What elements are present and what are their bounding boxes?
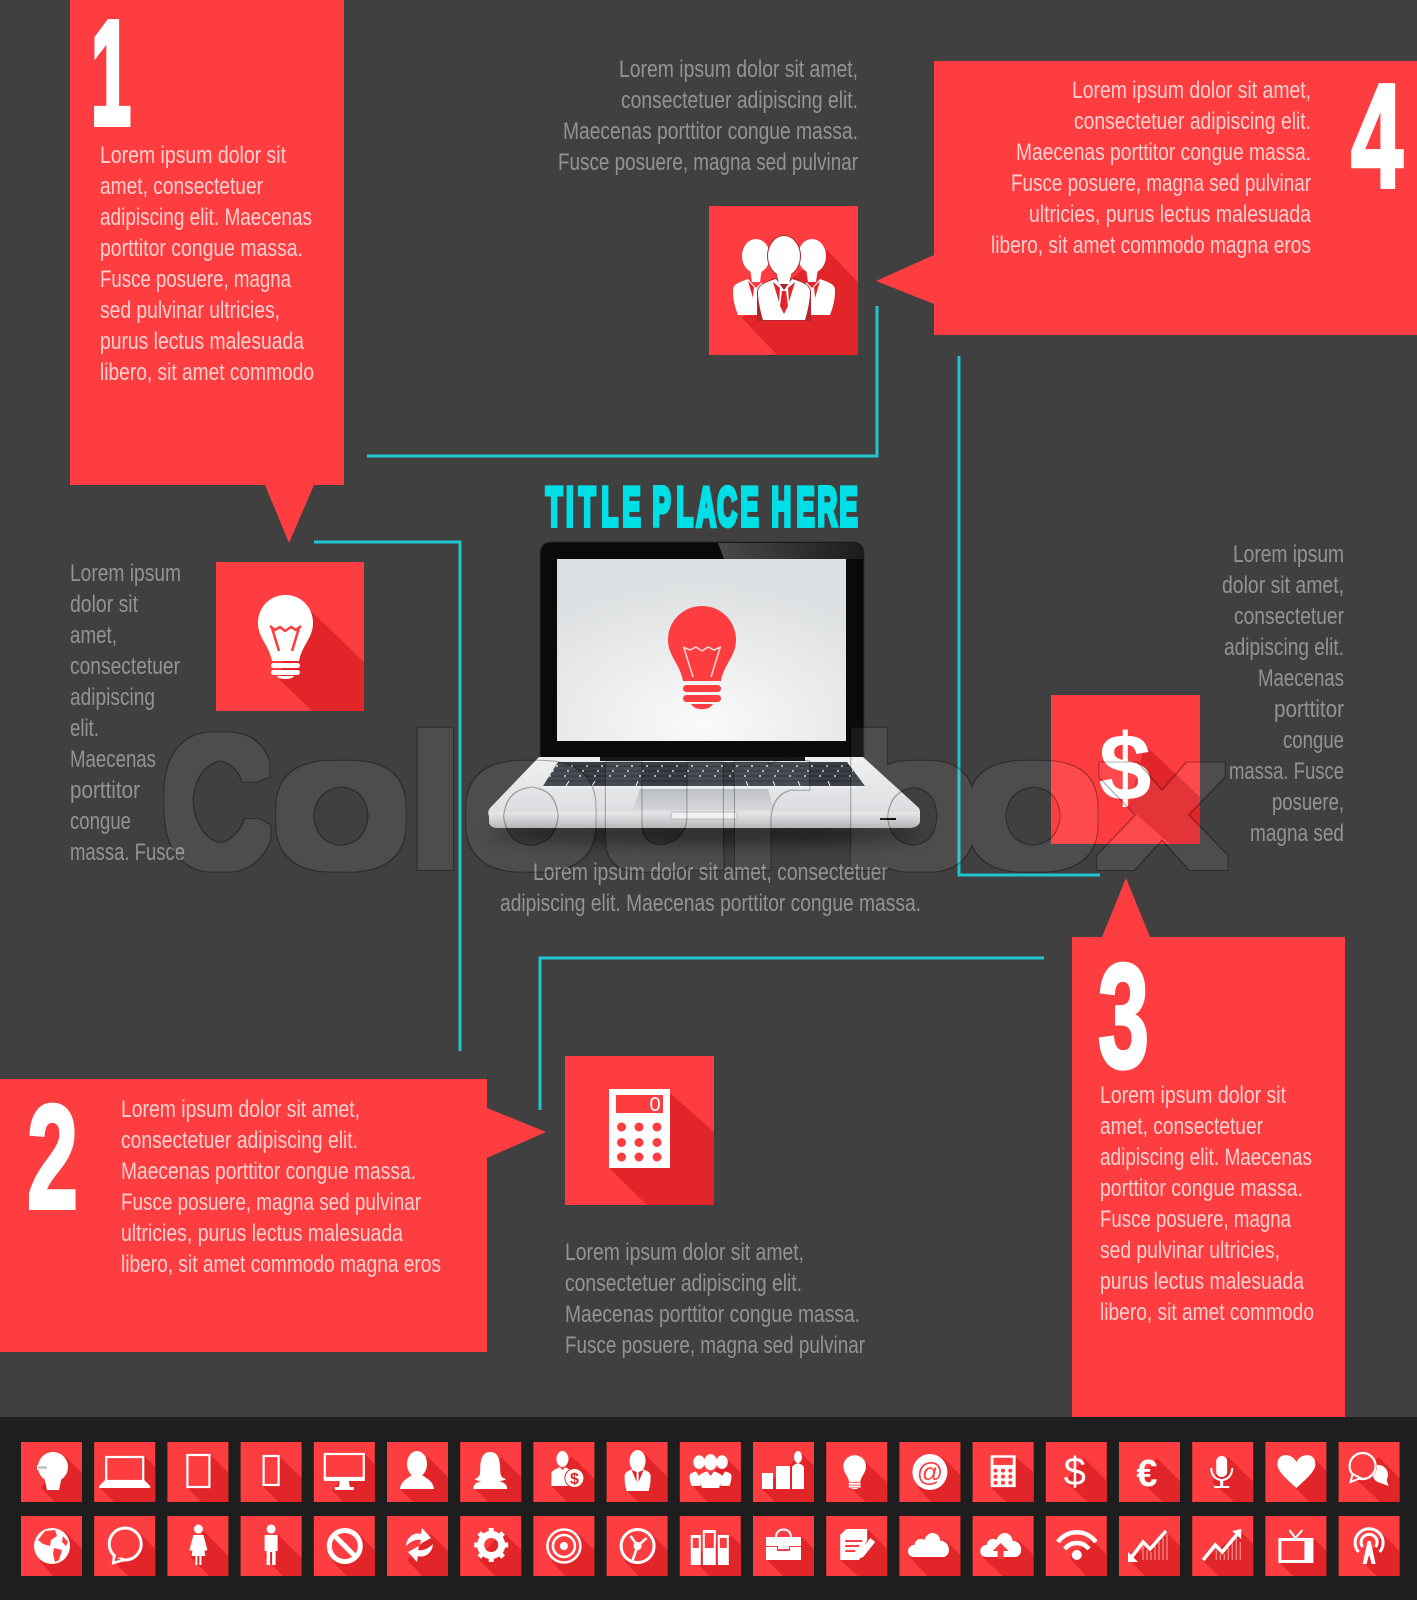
text block: top centre: Fusce posuere, magna sed pulvinar [558, 149, 858, 176]
icon: at sign [899, 1442, 960, 1502]
icon: speech bubbles [1339, 1442, 1400, 1502]
panel 2 text: Fusce posuere, magna sed pulvinar [121, 1189, 421, 1216]
laptop keyboard [543, 762, 865, 787]
text block: right of dollar icon: porttitor [1274, 696, 1344, 723]
panel 3 text: amet, consectetuer [1100, 1113, 1263, 1140]
icon: man in suit [607, 1442, 668, 1502]
text block: right of dollar icon: magna sed [1250, 820, 1344, 847]
laptop screen [557, 559, 846, 741]
icon: globe [21, 1516, 82, 1576]
icon: calculator: 0 [649, 1094, 661, 1116]
panel 1 text: sed pulvinar ultricies, [100, 297, 280, 324]
text block: left of bulb icon: dolor sit [70, 591, 138, 618]
icon: prohibited sign [314, 1516, 375, 1576]
icon: dollar sign: $ [1099, 715, 1151, 821]
panel 3 number: 3 [1098, 934, 1149, 1099]
connector line: bulb icon to panel 2 [314, 542, 460, 1051]
panel 1 text: purus lectus malesuada [100, 328, 305, 355]
panel 2 text: ultricies, purus lectus malesuada [121, 1220, 404, 1247]
text block: left of bulb icon: amet, [70, 622, 117, 649]
text block: top centre: consectetuer adipiscing elit. [621, 87, 858, 114]
panel 3 text: porttitor congue massa. [1100, 1175, 1303, 1202]
icon strip [0, 1417, 1417, 1600]
panel 2 text: Lorem ipsum dolor sit amet, [121, 1096, 360, 1123]
icon: cloud upload [973, 1516, 1034, 1576]
panel 2 text: consectetuer adipiscing elit. [121, 1127, 358, 1154]
connector line: panel 3 to calculator icon [540, 958, 1044, 1110]
text block: laptop caption [500, 859, 921, 917]
icon: euro: € [1136, 1453, 1158, 1495]
panel 3 text: adipiscing elit. Maecenas [1100, 1144, 1312, 1171]
text block: right of dollar icon: congue [1283, 727, 1344, 754]
laptop notch [671, 812, 737, 819]
icon: monitor [314, 1442, 375, 1502]
icon: microphone [1192, 1442, 1253, 1502]
icon: calculator [973, 1442, 1034, 1502]
panel 2 text: Maecenas porttitor congue massa. [121, 1158, 416, 1185]
panel 4 text: Fusce posuere, magna sed pulvinar [1011, 170, 1311, 197]
panel 3 text: Lorem ipsum dolor sit [1100, 1082, 1286, 1109]
watermark: C [164, 703, 269, 901]
panel 4 text: libero, sit amet commodo magna eros [991, 232, 1311, 259]
icon: man figure [241, 1516, 302, 1576]
panel 2 number: 2 [27, 1075, 78, 1240]
text block: left of bulb icon: adipiscing [70, 684, 155, 711]
icon: laptop [94, 1442, 155, 1502]
panel 1 text: adipiscing elit. Maecenas [100, 204, 312, 231]
text block: calculator caption: Lorem ipsum dolor sit amet, [565, 1239, 804, 1266]
icon: dollar sign [1051, 695, 1200, 844]
icon: gear [460, 1516, 521, 1576]
icon: speech bubble [94, 1516, 155, 1576]
icon: television [1265, 1516, 1326, 1576]
text block: right of dollar icon: consectetuer [1234, 603, 1344, 630]
icon: businessman with coin: $ [570, 1471, 579, 1488]
icon: dollar: $ [1064, 1450, 1086, 1494]
laptop base [488, 757, 920, 828]
icon: light bulb [826, 1442, 887, 1502]
panel 3 text: libero, sit amet commodo [1100, 1299, 1314, 1326]
text block: left of bulb icon: porttitor [70, 777, 140, 804]
panel 1 text [100, 142, 314, 386]
panel 3 text: Fusce posuere, magna [1100, 1206, 1291, 1233]
icon: light bulb [216, 562, 364, 711]
laptop lid and bezel [540, 542, 864, 758]
icon: target [533, 1516, 594, 1576]
panel 4 [876, 54, 1417, 335]
icon: falling chart [1119, 1516, 1180, 1576]
title: TITLE PLACE HERE [546, 477, 858, 538]
watermark: olourbox [273, 704, 1223, 901]
panel 3 text: sed pulvinar ultricies, [1100, 1237, 1280, 1264]
icon: document with pen [826, 1516, 887, 1576]
panel 4 text: Lorem ipsum dolor sit amet, [1072, 77, 1311, 104]
text block: left of bulb icon: Maecenas [70, 746, 156, 773]
icon: wifi [1046, 1516, 1107, 1576]
icon: cloud [899, 1516, 960, 1576]
icon: heart [1265, 1442, 1326, 1502]
panel 3 text: purus lectus malesuada [1100, 1268, 1305, 1295]
panel 4 text: Maecenas porttitor congue massa. [1016, 139, 1311, 166]
text block: laptop caption: Lorem ipsum dolor sit amet, consectetuer [533, 859, 888, 886]
panel 2 [0, 1075, 546, 1352]
panel 4 text [991, 77, 1312, 259]
text block: right of dollar icon [1222, 541, 1344, 847]
text block: top centre [558, 56, 858, 176]
icon: refresh arrows [387, 1516, 448, 1576]
panel 2 text [121, 1096, 441, 1278]
text block: left of bulb icon: consectetuer [70, 653, 180, 680]
panel 1 text: Lorem ipsum dolor sit [100, 142, 286, 169]
text block: right of dollar icon: adipiscing elit. [1224, 634, 1344, 661]
text block: left of bulb icon: congue [70, 808, 131, 835]
icon: woman figure [167, 1516, 228, 1576]
panel 4 text: consectetuer adipiscing elit. [1074, 108, 1311, 135]
text block: left of bulb icon: elit. [70, 715, 99, 742]
icon: man bust [387, 1442, 448, 1502]
icon: team of three people [709, 206, 858, 355]
panel 1 text: libero, sit amet commodo [100, 359, 314, 386]
laptop trackpad [633, 789, 774, 810]
icon: euro [1119, 1442, 1180, 1502]
text block: calculator caption: Fusce posuere, magna sed pulvinar [565, 1332, 865, 1359]
icon: woman bust [460, 1442, 521, 1502]
panel 2 text: libero, sit amet commodo magna eros [121, 1251, 441, 1278]
text block: right of dollar icon: Maecenas [1258, 665, 1344, 692]
icon: head with smart glasses [21, 1442, 82, 1502]
panel 1 text: amet, consectetuer [100, 173, 263, 200]
icon: team [680, 1442, 741, 1502]
icon: binders [680, 1516, 741, 1576]
text block: right of dollar icon: Lorem ipsum [1233, 541, 1344, 568]
icon: dollar [1046, 1442, 1107, 1502]
text block: right of dollar icon: posuere, [1272, 789, 1344, 816]
text block: right of dollar icon: dolor sit amet, [1222, 572, 1344, 599]
icon: businessman with coin [533, 1442, 594, 1502]
icon: at sign: @ [917, 1457, 943, 1487]
text block: left of bulb icon: Lorem ipsum [70, 560, 181, 587]
text block: calculator caption: consectetuer adipiscing elit. [565, 1270, 802, 1297]
laptop illustration [488, 542, 920, 844]
panel 1 text: porttitor congue massa. [100, 235, 303, 262]
text block: calculator caption: Maecenas porttitor congue massa. [565, 1301, 860, 1328]
panel 1 [70, 0, 344, 543]
screen bulb icon [668, 606, 736, 709]
panel 3 text [1100, 1082, 1314, 1326]
icon: bar chart and man [753, 1442, 814, 1502]
panel 4 text: ultricies, purus lectus malesuada [1029, 201, 1312, 228]
text block: left of bulb icon [70, 560, 185, 866]
text block: laptop caption: adipiscing elit. Maecenas porttitor congue massa. [500, 890, 921, 917]
text block: calculator caption [565, 1239, 865, 1359]
icon: phone [241, 1442, 302, 1502]
laptop indicator slot [880, 818, 896, 820]
panel 1 text: Fusce posuere, magna [100, 266, 291, 293]
text block: top centre: Maecenas porttitor congue massa. [563, 118, 858, 145]
connector line: panel 4 to dollar icon [959, 356, 1100, 875]
icon: tablet [167, 1442, 228, 1502]
text block: right of dollar icon: massa. Fusce [1229, 758, 1344, 785]
icon: broadcast tower [1339, 1516, 1400, 1576]
connector line: panel 1 to team icon [367, 306, 877, 456]
icon: briefcase [753, 1516, 814, 1576]
text block: top centre: Lorem ipsum dolor sit amet, [619, 56, 858, 83]
icon: calculator [565, 1056, 714, 1205]
panel 3 [1072, 878, 1345, 1417]
icon: round dial [607, 1516, 668, 1576]
text block: left of bulb icon: massa. Fusce [70, 839, 185, 866]
icon: rising chart [1192, 1516, 1253, 1576]
